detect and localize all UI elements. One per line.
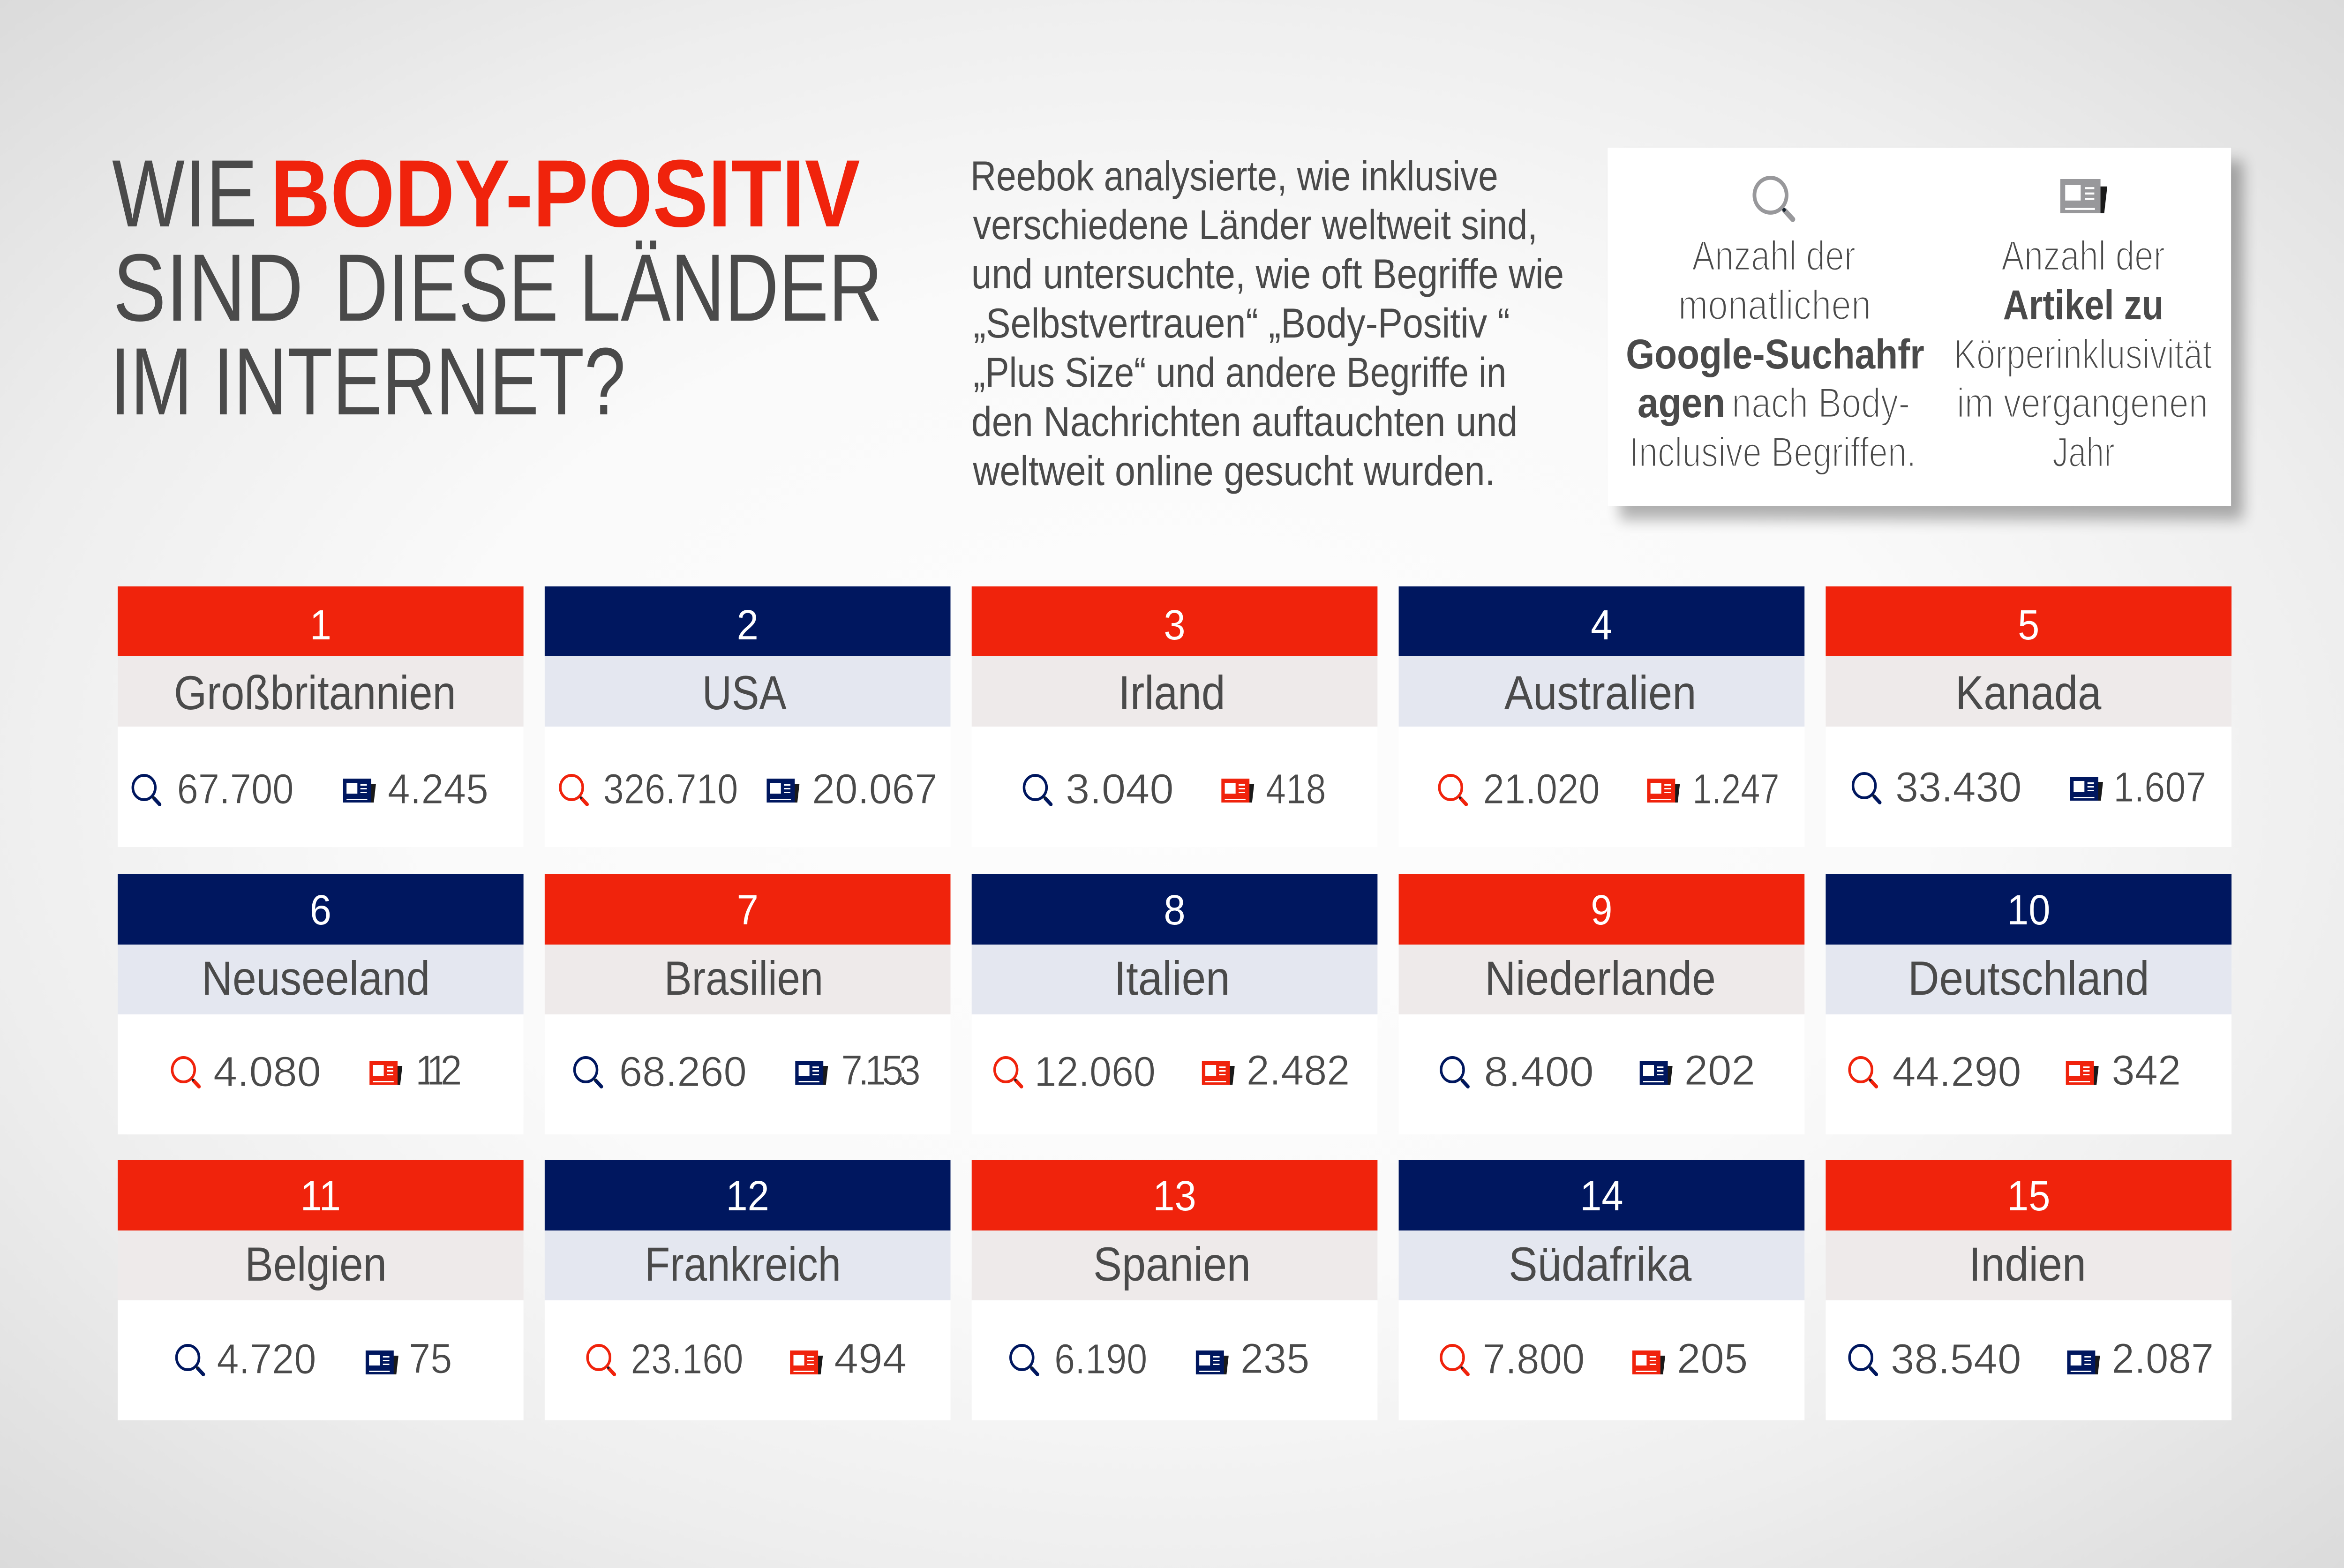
stats: 75 [409,1335,452,1382]
rank 5: 5 [2018,602,2039,649]
country name: Niederlande [1485,952,1716,1005]
rank 15: 15 [2007,1173,2050,1220]
card: 12 Frankreich [545,1160,951,1420]
legend: articles: Anzahl der [2001,233,2165,279]
stats: 494 [834,1335,907,1382]
country name [118,1230,524,1300]
stats: 202 [1684,1047,1755,1094]
stats: 3.040 [1066,766,1174,813]
rank 13: 13 [1153,1173,1196,1220]
stats [587,1335,907,1383]
rank 13 [972,1160,1377,1230]
stats [1439,766,1780,813]
stats [995,1047,1350,1095]
country name: Großbritannien [174,666,456,720]
stats [1849,1335,2214,1383]
intro paragraph: „Plus Size“ und andere Begriffe in [973,349,1506,396]
country name: Südafrika [1509,1238,1692,1291]
stats: 235 [1240,1335,1309,1382]
rank 3: 3 [1164,602,1186,649]
rank 10: 10 [2007,887,2050,934]
legend: monthly searches: nach Body- [1732,380,1910,427]
stats: 2.087 [2111,1335,2214,1382]
panel: legend [1608,148,2243,519]
title: DIESE LÄNDER [334,234,883,341]
rank 4: 4 [1591,602,1612,649]
rank 8 [972,874,1377,945]
stats: 2.482 [1247,1047,1350,1094]
legend: monthly searches: agen [1638,380,1725,427]
stats [133,766,488,813]
stats: 205 [1677,1335,1748,1382]
card: 15 Indien [1826,1160,2231,1420]
legend: articles: Artikel zu [2003,282,2164,329]
rank 11 [118,1160,524,1230]
rank 10 [1826,874,2231,945]
legend: monthly searches: Anzahl der [1692,233,1856,279]
rank 11: 11 [301,1173,341,1220]
title: BODY-POSITIV [270,140,860,247]
country name [972,656,1377,727]
rank 1: 1 [310,602,331,649]
country name [1399,1230,1804,1300]
card: 5 Kanada [1826,586,2231,847]
card: 7 Brasilien [545,874,951,1134]
rank 1 [118,586,524,656]
stats: 6.190 [1054,1336,1147,1383]
legend: monthly searches: Inclusive Begriffen. [1629,429,1916,476]
legend: monthly searches: monatlichen [1678,282,1871,329]
country name: Frankreich [645,1238,841,1291]
stats: 12.060 [1035,1049,1156,1095]
stats [172,1047,462,1095]
intro paragraph: den Nachrichten auftauchten und [971,398,1518,445]
intro paragraph [970,153,1564,495]
card: 3 Irland [972,586,1377,847]
title: SIND [113,234,303,341]
country name [545,656,951,727]
stats: 8.400 [1484,1049,1594,1095]
legend: articles: Körperinklusivität [1954,331,2212,378]
country name: Neuseeland [202,952,430,1005]
stats: 4.720 [217,1336,316,1383]
stats: 4.245 [388,766,488,813]
title: IM INTERNET? [110,328,625,435]
country name [1399,945,1804,1014]
title: WIE [112,140,257,247]
rank 5 [1826,586,2231,656]
stats: 342 [2111,1047,2181,1094]
legend: monthly searches: Google-Suchahfr [1626,331,1924,378]
card: 6 Neuseeland [118,874,524,1134]
rank 15 [1826,1160,2231,1230]
card: 11 Belgien [118,1160,524,1420]
rank 7: 7 [737,887,759,934]
country name [1399,656,1804,727]
rank 6 [118,874,524,945]
country name: Kanada [1955,666,2102,720]
legend: monthly searches [1626,178,1924,476]
legend: articles: Jahr [2052,429,2115,476]
stats: 68.260 [619,1049,747,1095]
stats [1011,1335,1309,1383]
country name: Belgien [245,1238,387,1291]
card: 14 Südafrika [1399,1160,1804,1420]
country name [972,945,1377,1014]
stats: 7.153 [841,1047,921,1094]
country name: Spanien [1093,1238,1251,1291]
country name: Italien [1114,952,1230,1005]
country name [1826,656,2231,727]
rank 14 [1399,1160,1804,1230]
country name: Australien [1504,666,1696,720]
country name: USA [702,666,787,720]
stats [1853,764,2207,811]
title [110,140,883,435]
rank 2 [545,586,951,656]
stats: 326.710 [603,766,738,813]
rank 12 [545,1160,951,1230]
stats [560,766,938,813]
country name: Brasilien [664,952,823,1005]
country name [118,945,524,1014]
intro paragraph: verschiedene Länder weltweit sind, [973,202,1538,248]
stats: 20.067 [812,766,938,813]
stats: 1.247 [1692,766,1780,813]
stats [1441,1047,1755,1095]
stats: 418 [1266,766,1326,813]
stats: 4.080 [213,1049,321,1095]
country name [545,1230,951,1300]
intro paragraph: Reebok analysierte, wie inklusive [970,153,1498,200]
card: 2 USA [545,586,951,847]
card: 9 Niederlande [1399,874,1804,1134]
country name: Deutschland [1908,952,2149,1005]
rank 9: 9 [1591,887,1612,934]
legend: articles [1954,179,2212,476]
card: 13 Spanien [972,1160,1377,1420]
stats [177,1335,452,1383]
legend: articles: im vergangenen [1957,380,2208,427]
intro paragraph: „Selbstvertrauen“ „Body-Positiv “ [973,300,1510,347]
country name [972,1230,1377,1300]
rank 6: 6 [310,887,331,934]
rank 4 [1399,586,1804,656]
stats: 7.800 [1483,1336,1585,1383]
stats: 33.430 [1895,764,2021,811]
stats: 112 [415,1047,462,1094]
stats [575,1047,921,1095]
rank 9 [1399,874,1804,945]
stats: 1.607 [2113,764,2207,811]
card: 1 Großbritannien [118,586,524,847]
stats: 23.160 [631,1336,743,1383]
stats: 21.020 [1483,766,1600,813]
stats: 38.540 [1891,1336,2021,1383]
rank 14: 14 [1580,1173,1623,1220]
rank 7 [545,874,951,945]
country name [1826,945,2231,1014]
rank 8: 8 [1164,887,1186,934]
rank 2: 2 [737,602,759,649]
card: 10 Deutschland [1826,874,2231,1134]
country name: Indien [1969,1238,2086,1291]
card: 8 Italien [972,874,1377,1134]
stats [1024,766,1326,813]
rank 12: 12 [726,1173,769,1220]
country name [118,656,524,727]
country name [545,945,951,1014]
rank 3 [972,586,1377,656]
intro paragraph: und untersuchte, wie oft Begriffe wie [971,251,1564,298]
country name [1826,1230,2231,1300]
stats [1441,1335,1748,1383]
country name: Irland [1119,666,1225,720]
intro paragraph: weltweit online gesucht wurden. [973,448,1495,495]
stats: 67.700 [177,766,294,813]
card: 4 Australien [1399,586,1804,847]
stats [1849,1047,2181,1095]
stats: 44.290 [1893,1049,2021,1095]
